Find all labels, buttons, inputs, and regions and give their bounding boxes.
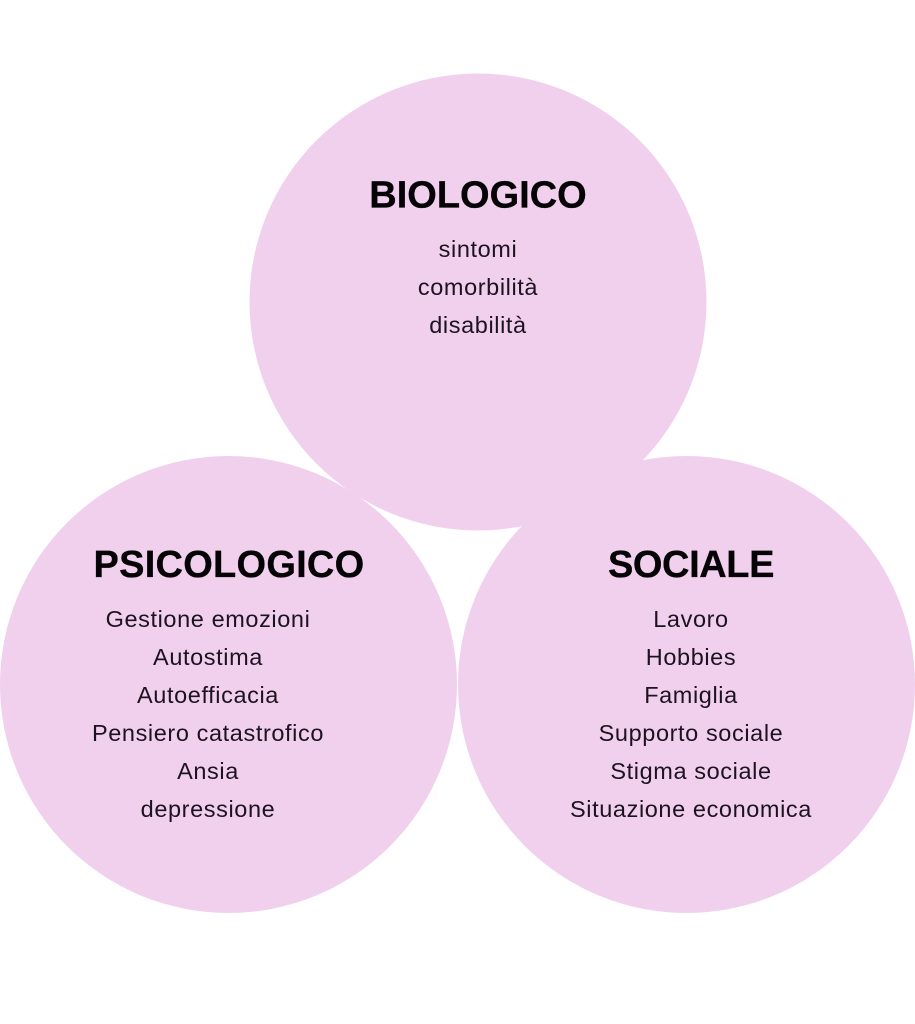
list: sociale items — [570, 606, 812, 822]
circle: sociale — [458, 456, 915, 913]
heading: psicologico: PSICOLOGICO — [94, 544, 364, 586]
list: psicologico items: depressione — [141, 796, 275, 822]
list: biologico items: comorbilità — [418, 274, 538, 300]
list: psicologico items: Pensiero catastrofico — [92, 720, 324, 746]
list: biologico items: disabilità — [429, 312, 527, 338]
panel: biologico text — [369, 174, 587, 338]
list: biologico items: sintomi — [439, 236, 517, 262]
list: sociale items: Stigma sociale — [610, 758, 772, 784]
list: biologico items — [418, 236, 538, 338]
circle: psicologico — [0, 456, 457, 913]
panel: sociale text — [570, 544, 812, 822]
list: sociale items: Hobbies — [646, 644, 736, 670]
list: sociale items: Supporto sociale — [599, 720, 783, 746]
circle: biologico — [250, 74, 706, 530]
list: psicologico items — [92, 606, 324, 822]
list: sociale items: Situazione economica — [570, 796, 812, 822]
heading: sociale: SOCIALE — [608, 544, 774, 586]
list: psicologico items: Autoefficacia — [137, 682, 279, 708]
panel: psicologico text — [92, 544, 364, 822]
list: sociale items: Lavoro — [653, 606, 729, 632]
list: psicologico items: Ansia — [177, 758, 239, 784]
heading: biologico: BIOLOGICO — [369, 174, 587, 216]
list: psicologico items: Gestione emozioni — [106, 606, 310, 632]
list: psicologico items: Autostima — [153, 644, 263, 670]
list: sociale items: Famiglia — [644, 682, 738, 708]
